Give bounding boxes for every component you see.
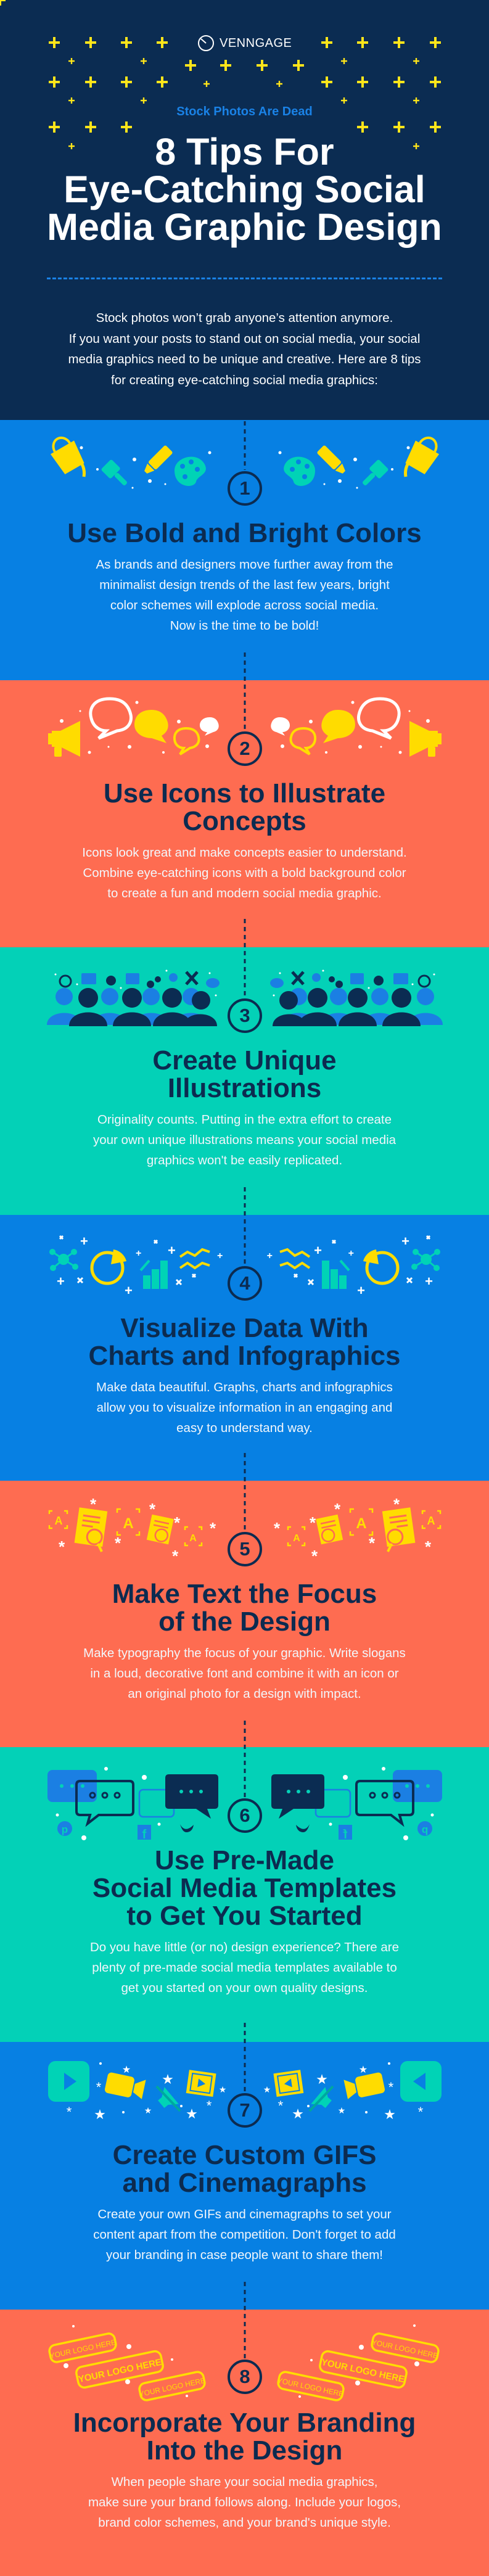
icons: charts and data: + (80, 1233, 88, 1249)
icons: typography: A (189, 1533, 197, 1544)
icons: logo stamps: YOUR LOGO HERE (77, 2357, 163, 2385)
text: tip 5: Make typography the focus of your graphic. Write slogans (83, 1646, 406, 1660)
text: tip 2: Icons look great and make concepts easier to understand. (82, 846, 407, 860)
icons: video and gifs: ★ (94, 2107, 106, 2122)
decorative stars (0, 0, 441, 149)
number badge 2: 2 (239, 738, 250, 759)
number badge 6 (228, 1798, 262, 1833)
text: tip 8: Into the Design (147, 2435, 342, 2466)
text: tip 6: Do you have little (or no) design experience? There are (90, 1940, 399, 1954)
icons: charts and data (49, 1233, 440, 1295)
panel: tip 3 (0, 947, 489, 1215)
icons: megaphones and speech bubbles (48, 697, 442, 757)
title: Media Graphic Design (47, 206, 442, 248)
logo: venngage (198, 35, 292, 51)
text: tip 2: Combine eye-catching icons with a bold background color (83, 866, 406, 880)
icons: logo stamps (48, 2324, 440, 2401)
icons: logo stamps: YOUR LOGO HERE (277, 2376, 345, 2398)
number badge 7 (228, 2093, 262, 2128)
number badge 4 (228, 1266, 262, 1301)
text: tip 7: and Cinemagraphs (122, 2168, 367, 2198)
intro text: If you want your posts to stand out on social media, your social (69, 332, 420, 345)
number badge 3: 3 (239, 1005, 250, 1026)
icons: typography (48, 1495, 442, 1561)
icons: video and gifs: ★ (122, 2065, 131, 2075)
text: tip 4: easy to understand way. (176, 1421, 313, 1435)
text: tip 8: make sure your brand follows along. Include your logos, (88, 2495, 401, 2509)
title: Eye-Catching Social (64, 168, 425, 210)
panel: tip 8 (0, 2310, 489, 2576)
text: tip 6 (90, 1845, 399, 1995)
icons: video and gifs: * (207, 2098, 212, 2113)
text: tip 5: Make Text the Focus (112, 1579, 377, 1609)
panel: tip 4 (0, 1215, 489, 1481)
text: tip 8: brand color schemes, and your brand's unique style. (98, 2516, 391, 2530)
icons: video and gifs: ★ (162, 2072, 174, 2087)
text: tip 6: plenty of pre-made social media templates available to (92, 1961, 397, 1975)
icons: typography: * (90, 1495, 97, 1513)
icons: people illustration (47, 969, 443, 1026)
text: tip 3: Create Unique (152, 1045, 337, 1076)
number badge 7: 7 (239, 2099, 250, 2121)
number badge 8: 8 (239, 2366, 250, 2387)
text: tip 1: minimalist design trends of the last few years, bright (99, 578, 390, 592)
text: tip 4: Charts and Infographics (88, 1341, 401, 1371)
icons: video and gifs: ★ (219, 2084, 226, 2094)
text: tip 5: in a loud, decorative font and combine it with an icon or (90, 1666, 399, 1681)
icons: typography: * (59, 1537, 65, 1556)
icons: charts and data: + (168, 1243, 176, 1258)
text: tip 4: allow you to visualize information in an engaging and (97, 1401, 392, 1415)
icons: logo stamps: YOUR LOGO HERE (138, 2376, 206, 2398)
icons: logo stamps: YOUR LOGO HERE (320, 2357, 406, 2385)
intro text: Stock photos won’t grab anyone’s attention anymore. (96, 311, 393, 325)
text: tip 4 (88, 1313, 401, 1435)
text: tip 1: Now is the time to be bold! (170, 619, 319, 633)
icons: typography: * (210, 1519, 216, 1537)
intro text (68, 311, 421, 387)
title (47, 131, 442, 248)
text: tip 6: Social Media Templates (92, 1873, 397, 1903)
text: tip 2: to create a fun and modern social media graphic. (107, 886, 382, 900)
number badge 2 (228, 731, 262, 766)
text: tip 6: Use Pre-Made (155, 1845, 334, 1875)
text: tip 7: Create your own GIFs and cinemagraphs to set your (97, 2207, 392, 2221)
text: tip 3 (93, 1045, 396, 1167)
text: tip 5 (83, 1579, 406, 1701)
panel: tip 5 (0, 1481, 489, 1747)
number badge 1 (228, 471, 262, 506)
number badge 5 (228, 1532, 262, 1566)
number badge 8 (228, 2360, 262, 2394)
icons: logo stamps: YOUR LOGO HERE (49, 2338, 117, 2360)
text: tip 7: Create Custom GIFS (113, 2140, 376, 2170)
number badge 5: 5 (239, 1538, 250, 1560)
icons: video and gifs: * (96, 2080, 102, 2095)
text: tip 1 (67, 518, 422, 633)
icons: video and gifs (48, 2061, 442, 2122)
text: tip 1: color schemes will explode across social media. (110, 598, 379, 612)
subtitle: Stock Photos Are Dead (176, 105, 313, 118)
text: tip 2: Use Icons to Illustrate (104, 778, 385, 809)
icons: chat templates and social logos: f (142, 1828, 147, 1841)
title: 8 Tips For (155, 131, 334, 173)
icons: video and gifs: * (67, 2104, 72, 2120)
intro text: for creating eye-catching social media graphics: (111, 372, 378, 387)
icons: charts and data: + (57, 1274, 65, 1289)
icons: typography: A (54, 1515, 63, 1527)
icons: typography: * (174, 1513, 181, 1532)
logo: venngage: VENNGAGE (220, 36, 292, 50)
icons: chat templates and social logos: p (62, 1824, 68, 1835)
icons: logo stamps: YOUR LOGO HERE (371, 2338, 439, 2360)
text: tip 7: content apart from the competition. Don't forget to add (93, 2228, 396, 2242)
panel: tip 6 (0, 1747, 489, 2042)
text: tip 7: your branding in case people want to share them! (106, 2248, 383, 2262)
icons: chat templates and social logos (47, 1767, 442, 1841)
text: tip 4: Make data beautiful. Graphs, charts and infographics (96, 1380, 393, 1394)
icons: video and gifs: ★ (144, 2105, 152, 2115)
icons: typography: * (115, 1534, 121, 1552)
text: tip 6: get you started on your own quality designs. (121, 1981, 368, 1995)
text: tip 8 (73, 2408, 416, 2530)
text: tip 3: your own unique illustrations means your social media (93, 1133, 396, 1147)
number badge 4: 4 (239, 1272, 250, 1294)
text: tip 4: Visualize Data With (120, 1313, 369, 1343)
text: tip 6: to Get You Started (126, 1901, 363, 1931)
number badge 6: 6 (239, 1804, 250, 1826)
text: tip 8: Incorporate Your Branding (73, 2408, 416, 2438)
text: tip 3: graphics won't be easily replicated. (147, 1153, 342, 1167)
text: tip 1: As brands and designers move further away from the (96, 558, 393, 572)
text: tip 5: an original photo for a design with impact. (128, 1687, 361, 1701)
text: tip 1: Use Bold and Bright Colors (67, 518, 422, 548)
icons: charts and data: + (136, 1248, 141, 1259)
text: tip 8: When people share your social media graphics, (112, 2475, 377, 2489)
icons: typography: * (149, 1500, 156, 1518)
panel: tip 1 (0, 420, 489, 680)
text: tip 5: of the Design (158, 1607, 331, 1637)
icons: charts and data: + (217, 1251, 223, 1261)
text: tip 3: Illustrations (168, 1073, 321, 1103)
text: tip 2: Concepts (183, 806, 306, 836)
panel: header (0, 0, 489, 420)
text: tip 7 (93, 2140, 396, 2262)
icons: typography: A (123, 1515, 134, 1532)
text: tip 2 (82, 778, 407, 900)
number badge 3 (228, 998, 262, 1033)
icons: video and gifs: ★ (186, 2106, 198, 2121)
panel: tip 2 (0, 680, 489, 947)
icons: paint tools (51, 437, 439, 488)
intro text: media graphics need to be unique and creative. Here are 8 tips (68, 352, 421, 366)
panel: tip 7 (0, 2042, 489, 2310)
number badge 1: 1 (239, 477, 250, 499)
text: tip 3: Originality counts. Putting in the extra effort to create (97, 1113, 392, 1127)
